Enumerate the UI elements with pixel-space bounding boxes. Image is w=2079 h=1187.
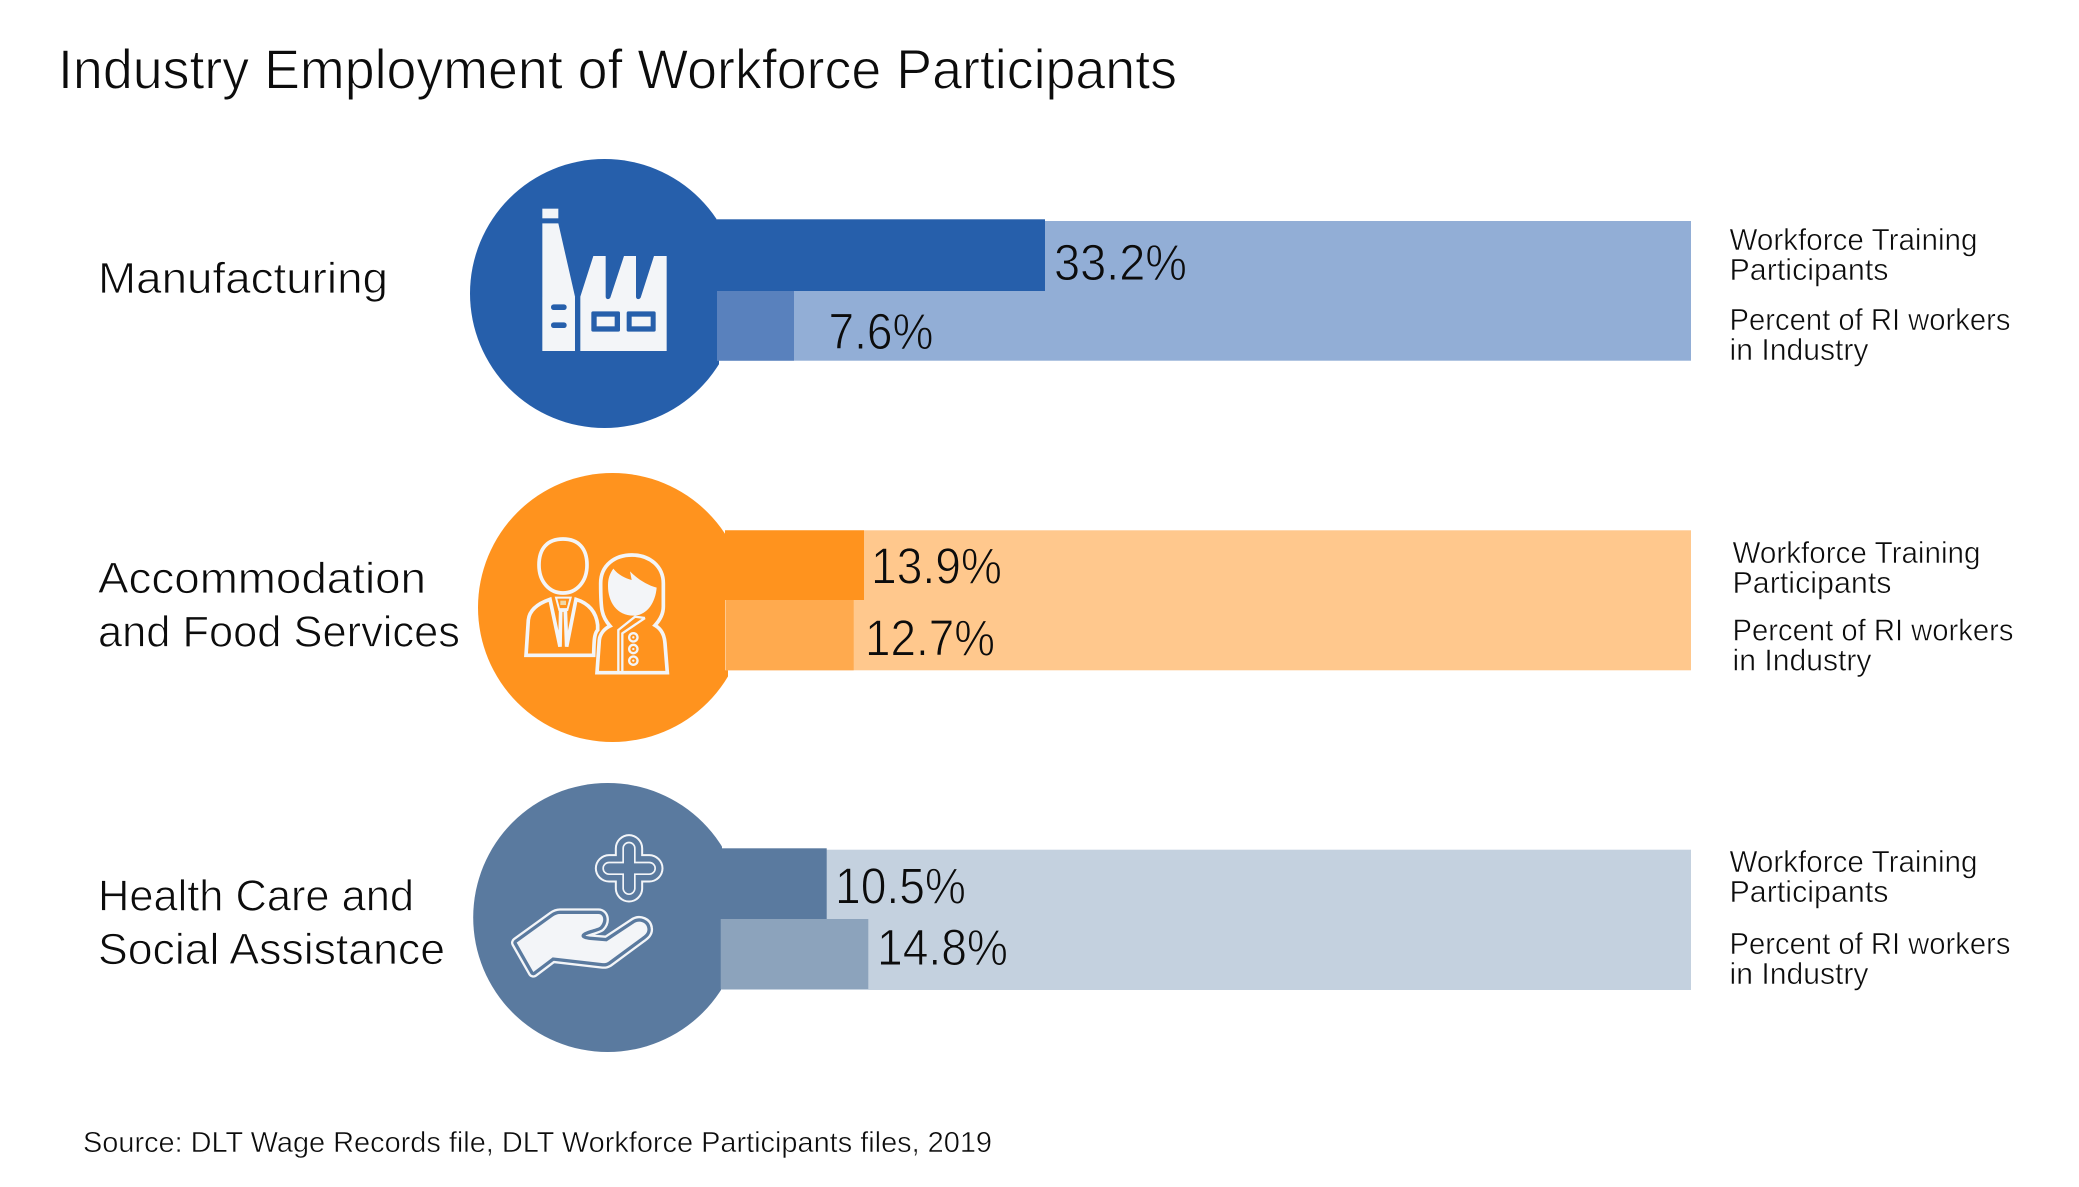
value: 14.8%: 14.8% [877,919,1008,976]
legend: percent of RI workers in industry: in Industry [1730,957,1869,991]
value: 12.7%: 12.7% [865,610,995,667]
legend: percent of RI workers in industry: Percent of RI workers [1730,927,2010,961]
value: 33.2%: 33.2% [1054,234,1187,291]
bar: workforce participants 33.2% [717,219,1045,291]
legend: workforce training participants: Participants [1730,875,1888,909]
title: Industry Employment of Workforce Participants [58,38,1177,100]
value: 7.6%: 7.6% [828,303,934,360]
circle: health care [473,783,742,1052]
legend: percent of RI workers in industry: Percent of RI workers [1730,303,2010,337]
industry label: health care and social assistance: Health Care and [98,872,414,921]
legend: percent of RI workers in industry [1730,927,2010,991]
value: 13.9%: 13.9% [871,537,1002,594]
legend: workforce training participants: Workforce Training [1732,536,1980,570]
panel: health care and social assistance [98,783,2010,1052]
bar background: health care [721,850,1691,990]
industry label: accommodation and food services: and Food Services [98,608,460,657]
panel: accommodation and food services [98,473,2014,742]
legend: percent of RI workers in industry [1730,303,2010,367]
bar: RI workers 14.8% [721,919,868,989]
bar: RI workers 7.6% [717,291,794,361]
legend: percent of RI workers in industry [1732,614,2014,678]
circle: manufacturing [470,159,739,428]
bar: RI workers 12.7% [726,600,854,670]
legend: workforce training participants: Participants [1730,253,1888,287]
legend: workforce training participants [1732,536,1980,600]
bar: workforce participants 13.9% [725,530,864,600]
legend: workforce training participants: Workforce Training [1730,223,1978,257]
industry label: accommodation and food services: Accommodation [98,554,426,603]
industry label: accommodation and food services [98,554,460,657]
legend: workforce training participants: Workforce Training [1730,845,1978,879]
circle: accommodation [478,473,747,742]
bar background: accommodation [725,530,1691,670]
industry label: health care and social assistance: Social Assistance [98,925,445,974]
legend: workforce training participants [1730,845,1978,909]
legend: workforce training participants [1730,223,1978,287]
legend: percent of RI workers in industry: in Industry [1730,333,1869,367]
legend: workforce training participants: Participants [1732,566,1892,600]
bar background: manufacturing [717,221,1691,361]
icon: man and woman workers [526,539,667,673]
value: 10.5%: 10.5% [835,857,966,914]
legend: percent of RI workers in industry: in Industry [1732,644,1872,678]
legend: percent of RI workers in industry: Percent of RI workers [1732,614,2014,648]
icon: factory [542,209,667,351]
bar: workforce participants 10.5% [721,848,827,919]
panel: manufacturing [98,159,2010,428]
source note: Source: DLT Wage Records file, DLT Workforce Participants files, 2019 [83,1127,992,1159]
icon: hand holding medical cross [517,848,649,972]
industry label: health care and social assistance [98,872,445,974]
industry label: manufacturing: Manufacturing [98,254,388,303]
